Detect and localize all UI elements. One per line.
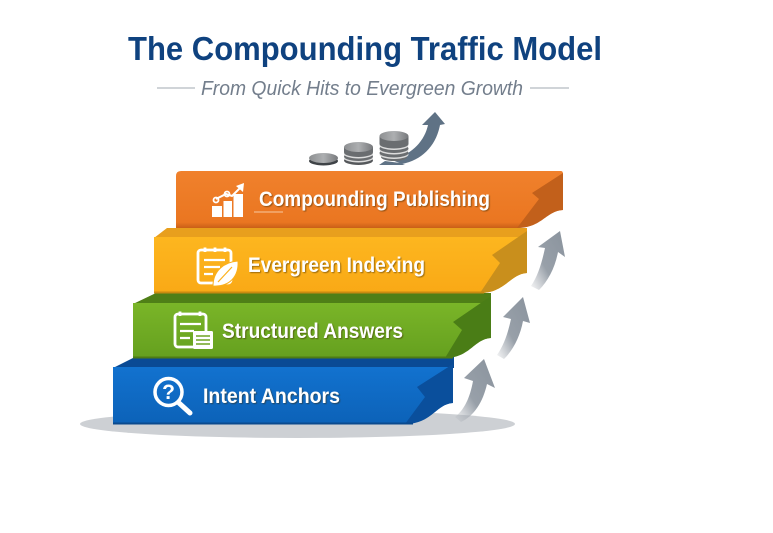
- panel: Evergreen Indexing step: [154, 228, 527, 294]
- icon: magnifier with question mark: ?: [162, 381, 175, 404]
- arrow: growth arrow upper: [531, 231, 565, 290]
- label: Structured Answers: [222, 320, 403, 343]
- subtitle: From Quick Hits to Evergreen Growth: [201, 78, 523, 100]
- icon: calendar with leaf: [198, 248, 238, 286]
- icon: document calendar: [175, 312, 213, 349]
- icon: magnifier with question mark: [155, 378, 190, 413]
- fold: [445, 296, 491, 358]
- arrow: growth arrow lower: [455, 359, 495, 422]
- icon: coin stacks with growth arrow: [309, 112, 445, 166]
- fold: [480, 231, 527, 293]
- panel: Intent Anchors step: [113, 357, 454, 424]
- fold: [517, 173, 563, 228]
- fold: [405, 364, 453, 424]
- title: The Compounding Traffic Model: [128, 31, 602, 68]
- icon: rising bar chart: [212, 183, 244, 217]
- label: Intent Anchors: [203, 385, 340, 408]
- arrow: growth arrow middle: [497, 297, 530, 359]
- panel: Structured Answers step: [133, 293, 491, 358]
- ground shadow: [80, 410, 515, 438]
- label: Compounding Publishing: [259, 188, 490, 211]
- panel: Compounding Publishing step: [176, 171, 563, 228]
- label: Evergreen Indexing: [248, 254, 425, 277]
